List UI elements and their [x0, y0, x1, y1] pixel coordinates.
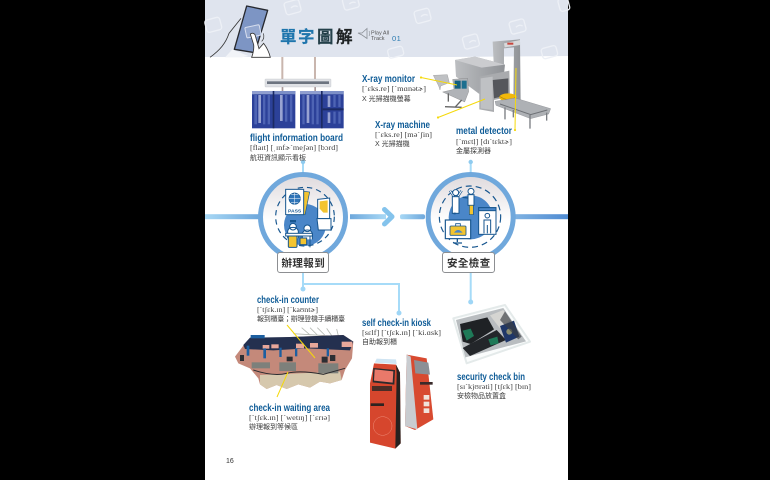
label: check-in	[278, 252, 328, 272]
check-in counter photo	[235, 328, 353, 389]
text: flight information board: [flaɪt] [ˌɪnfɚˋmeʃən] [bɔrd]	[250, 144, 338, 152]
process flow line and arrow	[205, 210, 568, 224]
title: 圖	[317, 28, 334, 46]
text: check-in waiting area: [ˋtʃɛk.ɪn] [ˋwetɪŋ] [ˋɛrɪə]	[249, 414, 330, 422]
connector lines: top	[301, 160, 473, 173]
connector lines: bottom	[300, 272, 473, 316]
yellow pointer: x-ray monitor	[420, 76, 457, 85]
text: security check bin: [sɪˋkjʊrəti] [tʃɛk] [bɪn]	[457, 383, 531, 391]
yellow pointer: check-in counter	[287, 325, 315, 358]
text: metal detector: 金屬探測器	[456, 146, 491, 155]
text: x-ray machine: [ˋɛks.re] [məˋʃin]	[375, 131, 432, 139]
text: self check-in kiosk: self check-in kiosk	[362, 318, 431, 329]
text: metal detector	[456, 126, 512, 155]
text: check-in counter: [ˋtʃɛk.ɪn] [ˋkaʊntɚ]	[257, 306, 318, 314]
panel: check-in circle icon: PASS	[288, 208, 302, 214]
yellow pointer: x-ray machine	[437, 99, 485, 119]
audio track control: Play All	[371, 30, 389, 36]
label: security check	[442, 252, 494, 272]
yellow pointer: metal detector	[514, 68, 516, 131]
audio track control	[358, 28, 401, 43]
text: check-in waiting area	[249, 403, 330, 431]
text: security check bin: 安檢物品放置盒	[457, 391, 506, 400]
label: check-in: 辦理報到	[282, 256, 325, 269]
text: x-ray monitor: [ˋɛks.re] [ˋmɑnətɚ]	[362, 85, 426, 93]
text: security check bin	[457, 372, 531, 400]
text: flight information board	[250, 133, 343, 162]
text: x-ray machine: X-ray machine	[375, 120, 430, 131]
panel: check-in circle icon	[260, 174, 346, 260]
text: flight information board: flight information board	[250, 133, 343, 144]
text: check-in counter	[257, 295, 345, 323]
text: check-in counter: 報到櫃臺；辦理登機手續櫃臺	[257, 314, 345, 323]
text: x-ray machine	[375, 120, 432, 148]
text: self check-in kiosk	[362, 318, 441, 346]
text: x-ray monitor: X 光掃描機螢幕	[362, 94, 411, 103]
title: 解	[336, 28, 353, 46]
self check-in kiosk photo	[370, 355, 433, 449]
title: 單	[280, 28, 296, 46]
audio track control: 01	[392, 34, 401, 43]
text: security check bin: security check bin	[457, 372, 525, 383]
title: 字	[298, 26, 314, 46]
header band	[204, 0, 570, 59]
page number: 16	[226, 458, 234, 465]
security check bin photo	[453, 305, 530, 363]
title	[280, 26, 353, 46]
yellow pointer: check-in waiting area	[277, 372, 288, 397]
icon: hand holding phone	[210, 6, 270, 57]
text: check-in counter: check-in counter	[257, 295, 319, 306]
label: security check: 安全檢查	[447, 256, 491, 269]
text: x-ray monitor: X-ray monitor	[362, 74, 415, 85]
text: x-ray monitor	[362, 74, 426, 103]
text: metal detector: metal detector	[456, 126, 512, 137]
text: check-in waiting area: 辦理報到等候區	[249, 422, 298, 431]
text: flight information board: 航班資訊顯示看板	[250, 153, 306, 162]
page background	[205, 0, 568, 480]
text: metal detector: [ˋmɛtḷ] [dɪˋtɛktɚ]	[456, 138, 512, 146]
text: self check-in kiosk: 自助報到櫃	[362, 337, 397, 346]
panel: security check circle icon	[428, 174, 513, 260]
text: check-in waiting area: check-in waiting area	[249, 403, 330, 414]
x-ray machine image	[433, 39, 551, 129]
audio track control: Track	[371, 36, 385, 42]
text: self check-in kiosk: [sɛlf] [ˋtʃɛk.ɪn] [ˋki.ɑsk]	[362, 329, 441, 337]
flight information board image	[252, 57, 344, 128]
text: x-ray machine: X 光掃描機	[375, 139, 410, 148]
